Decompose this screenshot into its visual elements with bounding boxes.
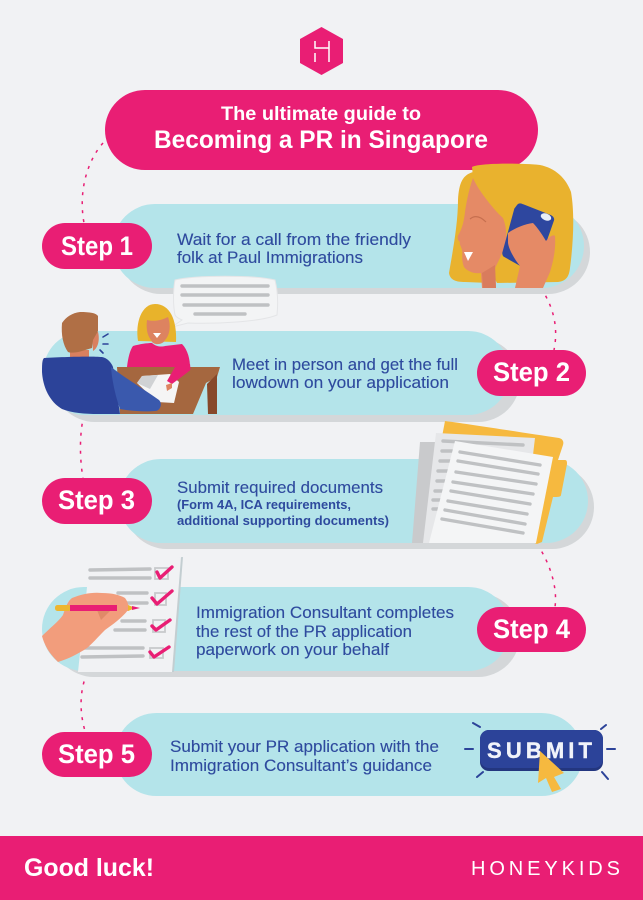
connector: step 4 to step 5: [81, 673, 87, 731]
panel: step 5: [42, 713, 615, 796]
step 5 badge: [42, 732, 152, 777]
icon: documents folder: [412, 421, 567, 544]
panel: step 4: [42, 557, 586, 677]
step 4 badge: [477, 607, 586, 652]
icon: woman on phone: [449, 164, 573, 288]
title line 1: The ultimate guide to: [221, 104, 421, 125]
connector: step 3 to step 4: [537, 544, 556, 607]
step 2 text: [232, 356, 458, 392]
title line 2: Becoming a PR in Singapore: [154, 126, 488, 154]
icon: submit button with cursor: SUBMIT: [487, 738, 593, 763]
footer band: [0, 836, 643, 900]
step 3 text: (Form 4A, ICA requirements,: [177, 498, 351, 512]
step 1 badge: Step 1: [61, 231, 133, 261]
step 3 badge: Step 3: [58, 485, 135, 515]
speech bubble: [172, 276, 278, 327]
step 4 text: paperwork on your behalf: [196, 641, 389, 659]
step 2 badge: Step 2: [493, 357, 570, 387]
step 5 text: Immigration Consultant’s guidance: [170, 757, 432, 775]
illustration: meeting at a table: [42, 304, 220, 414]
step 3 text: additional supporting documents): [177, 514, 389, 528]
step 3 text: Submit required documents: [177, 479, 383, 497]
panel: step 3: [42, 421, 594, 549]
icon: submit button with cursor: [465, 723, 615, 792]
title banner: [105, 90, 538, 170]
step 4 text: [196, 604, 454, 659]
step 4 badge: Step 4: [493, 614, 570, 644]
footer message: Good luck!: [24, 854, 154, 882]
step 4 text: the rest of the PR application: [196, 623, 412, 641]
footer brand: HONEYKIDS: [471, 858, 620, 880]
step 2 badge: [477, 350, 586, 396]
step 2 text: Meet in person and get the full: [232, 356, 458, 374]
connector: step 2 to step 3: [80, 415, 84, 478]
step 1 text: [177, 231, 412, 267]
logo: hexagon: [300, 27, 343, 75]
step 3 text: [177, 479, 389, 528]
step 1 text: Wait for a call from the friendly: [177, 231, 412, 249]
step 5 text: [170, 738, 439, 775]
step 5 text: Submit your PR application with the: [170, 738, 439, 756]
step 3 badge: [42, 478, 152, 524]
panel: step 2: [42, 276, 586, 422]
connector: step 1 to step 2: [541, 288, 556, 350]
step 5 badge: Step 5: [58, 739, 135, 769]
icon: checklist with hand and pencil: [42, 557, 183, 672]
step 4 text: Immigration Consultant completes: [196, 604, 454, 622]
panel: step 1: [42, 164, 590, 294]
step 1 badge: [42, 223, 152, 269]
connector: title to step 1: [82, 143, 103, 223]
step 1 text: folk at Paul Immigrations: [177, 249, 363, 267]
step 2 text: lowdown on your application: [232, 374, 449, 392]
